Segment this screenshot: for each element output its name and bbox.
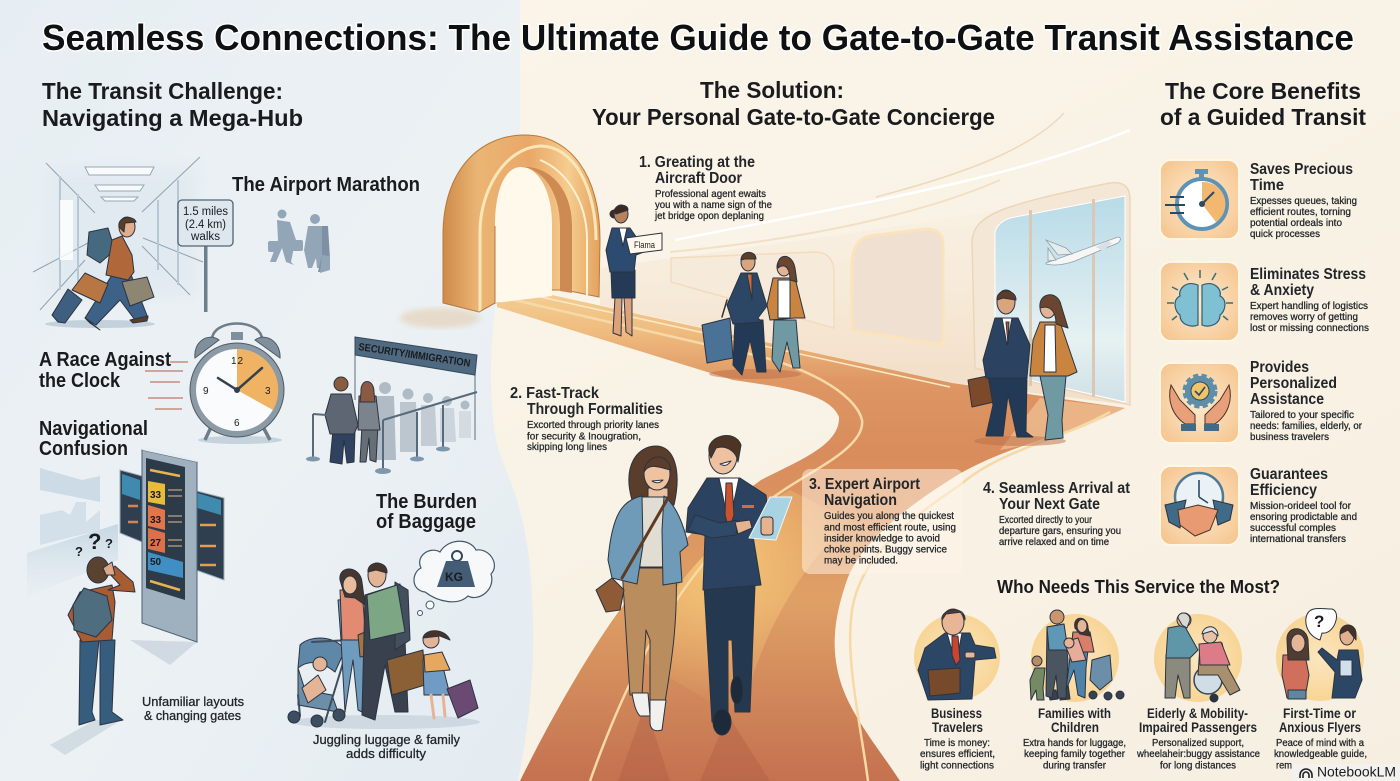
text: elderly: Eiderly & Mobility- [1147,706,1248,721]
text: business travelers: Travelers [932,720,983,735]
benefit: saves time [1160,160,1357,240]
watermark: NotebookLM: NotebookLM [1317,764,1396,780]
icon: confused traveler: ? [75,544,83,559]
audience: business travelers [914,609,1000,772]
illustration: airport corridor and traveler [33,157,203,330]
text: families: Children [1051,720,1099,735]
step 4: seamless arrival: Your Next Gate [999,496,1100,513]
step 1: greeting: Professional agent ewaits [655,188,766,200]
text: families: during transfer [1043,760,1106,772]
step 2: fast-track: skipping long lines [527,441,607,453]
step 3: navigation card: may be included. [824,554,898,566]
text: business travelers: ensures efficient, [920,748,995,760]
text: business travelers: Time is money: [924,737,990,749]
caption: unfamiliar layouts: & changing gates [144,709,241,723]
caption: unfamiliar layouts: Unfamiliar layouts [142,695,244,709]
text: elderly: Impaired Passengers [1139,720,1257,735]
caption: juggling luggage [313,733,461,761]
wall panel 2 [852,229,943,345]
walkway road [497,283,1125,781]
step 4: seamless arrival: departure gars, ensuring you [999,525,1121,537]
caption: unfamiliar layouts [142,695,244,723]
heading: transit challenge: Navigating a Mega-Hub [42,105,303,131]
illustration: faded background signs [27,468,118,597]
icon: anxious flyer and guide: ? [1314,612,1324,631]
text: guarantees efficiency: Efficiency [1250,482,1317,499]
heading: race against the clock [39,349,171,392]
text: guarantees efficiency: ensoring prodictable and [1250,511,1357,523]
step 4: seamless arrival: Excorted directly to your [999,514,1092,526]
heading: race against the clock: A Race Against [39,349,171,371]
illustration: family with luggage [288,563,480,729]
heading: who needs this: Who Needs This Service the Most? [997,577,1280,597]
sign: walking distance: 1.5 miles [183,206,228,218]
benefit: eliminates stress [1160,262,1369,341]
sign: walking distance: walks [190,231,220,243]
caption: juggling luggage: adds difficulty [346,747,427,761]
text: first-time flyers [1274,706,1367,772]
text: personalized assistance: business travelers [1250,431,1329,443]
icon: wayfinding kiosk: 33 [150,515,162,526]
text: eliminates stress: Eliminates Stress [1250,266,1366,283]
icon: alarm clock: 3 [265,386,271,397]
icon: wayfinding kiosk: 50 [150,557,162,568]
benefit: guarantees efficiency [1160,466,1357,545]
text: families: keeping family together [1024,748,1125,760]
text: elderly [1136,706,1260,772]
text: first-time flyers: First-Time or [1283,706,1357,721]
panel: solution scene [400,113,1130,781]
icon: confused traveler: ? [105,536,113,551]
step 3: navigation card: 3. Expert Airport [809,476,920,493]
couple arriving at gate [968,290,1077,446]
icon: businessman [914,609,1000,700]
step 2: fast-track: for security & Inougration, [527,430,641,442]
text: elderly: wheelaheir:buggy assistance [1136,748,1260,760]
icon: wayfinding kiosk: 27 [150,538,162,549]
text: personalized assistance: Personalized [1250,375,1337,392]
text: personalized assistance: Assistance [1250,391,1324,408]
couple with suitcase [702,252,805,379]
sign: walking distance: (2.4 km) [185,219,226,231]
caption: juggling luggage: Juggling luggage & family [313,733,461,747]
text: eliminates stress: & Anxiety [1250,282,1314,299]
text: families: Families with [1038,706,1111,721]
icon: thought bubble with weight [414,541,494,616]
step 3: navigation card: choke points. Buggy service [824,544,947,556]
text: first-time flyers: Anxious Flyers [1279,720,1361,735]
title: Seamless Connections: The Ultimate Guide to Gate-to-Gate Transit Assistance [42,17,1354,58]
step 3: navigation card: insider knowledge to avoid [824,532,940,544]
icon: family [1030,610,1124,702]
text: eliminates stress: Expert handling of logistics [1250,300,1368,312]
panel: who needs this service [914,577,1367,772]
step 1: greeting: you with a name sign of the [655,199,772,211]
text: personalized assistance [1250,359,1362,443]
heading: airport marathon: The Airport Marathon [232,174,420,196]
heading: the solution [592,77,995,130]
icon: alarm clock: 9 [203,386,209,397]
icon: clock and handshake [1160,466,1239,545]
heading: transit challenge: The Transit Challenge: [42,78,283,104]
heading: navigational confusion: Navigational [39,418,148,440]
text: personalized assistance: Tailored to your specific [1250,409,1354,421]
text: saves time: quick processes [1250,228,1320,240]
heading: burden of baggage: of Baggage [376,511,476,533]
step 2: fast-track [510,385,663,453]
text: personalized assistance: Provides [1250,359,1309,376]
sign: walking distance [178,200,233,312]
step 2: fast-track: Through Formalities [527,401,663,418]
heading: core benefits [1160,78,1366,130]
heading: the solution: The Solution: [700,77,844,103]
step 3: navigation card [802,469,963,574]
step 1: greeting: Aircraft Door [655,170,742,187]
window and plane [972,183,1130,405]
text: saves time: potential ordeals into [1250,217,1342,229]
step 4: seamless arrival [983,480,1130,548]
audience: elderly [1136,613,1260,772]
heading: core benefits: of a Guided Transit [1160,104,1366,130]
icon: confused traveler: ? [88,529,101,554]
heading: transit challenge [42,78,303,131]
background: cool left side [0,0,533,781]
icon: thought bubble with weight: KG [445,570,463,584]
step 1: greeting [639,154,772,222]
main couple: traveler and concierge [596,436,792,735]
text: guarantees efficiency [1250,466,1357,545]
illustration: security queue [306,337,477,474]
step 2: fast-track: 2. Fast-Track [510,385,599,402]
step 3: navigation card: Navigation [824,492,897,509]
heading: navigational confusion: Confusion [39,438,128,460]
text: business travelers [920,706,995,772]
text: guarantees efficiency: international transfers [1250,533,1346,545]
heading: core benefits: The Core Benefits [1165,78,1361,104]
text: guarantees efficiency: Mission-orideel tool for [1250,500,1351,512]
text: guarantees efficiency: successful comples [1250,522,1336,534]
heading: race against the clock: the Clock [39,370,121,392]
step 1: greeting: 1. Greating at the [639,154,755,171]
panel: core benefits [1160,78,1369,545]
step 2: fast-track: Excorted through priority lanes [527,419,659,431]
step 3: navigation card: Guides you along the quickest [824,510,954,522]
icon: wheelchair and caregiver [1154,613,1242,702]
text: business travelers: light connections [920,760,994,772]
audience: first-time flyers [1274,608,1367,772]
icon: brain [1160,262,1239,341]
illustration: security queue: SECURITY/IMMIGRATION [358,341,471,370]
text: personalized assistance: needs: families, elderly, or [1250,420,1362,432]
jet bridge wall [600,183,1130,405]
heading: burden of baggage: The Burden [376,491,477,513]
icon: anxious flyer and guide [1276,608,1364,701]
heading: burden of baggage [376,491,477,533]
step 4: seamless arrival: arrive relaxed and on time [999,536,1109,548]
greeter agent with name sign [606,205,662,336]
text: first-time flyers: Peace of mind with a [1276,737,1364,749]
text: eliminates stress: lost or missing connections [1250,322,1369,334]
wall panel 1 [671,252,834,328]
text: elderly: Personalized support, [1152,737,1244,749]
heading: the solution: Your Personal Gate-to-Gate Concierge [592,104,995,130]
icon: alarm clock: 12 [231,356,243,367]
icon: wayfinding kiosk: 33 [150,490,162,501]
watermark: NotebookLM [1292,764,1400,781]
text: elderly: for long distances [1160,760,1236,772]
step 1: greeting: jet bridge opon deplaning [654,210,764,222]
benefit: personalized assistance [1160,359,1362,443]
panel: solution text [510,77,1130,574]
step 4: seamless arrival: 4. Seamless Arrival at [983,480,1130,497]
arch doorway [400,135,600,328]
heading: navigational confusion [39,418,148,460]
text: saves time: efficient routes, torning [1250,206,1351,218]
icon: stopwatch [1160,160,1239,239]
text: guarantees efficiency: Guarantees [1250,466,1328,483]
text: saves time: Expesses queues, taking [1250,195,1357,207]
icon: wayfinding kiosk [120,447,224,665]
icon: alarm clock [145,324,284,444]
audience: families [1023,610,1126,772]
icon: alarm clock: 6 [234,418,240,429]
text: saves time [1250,161,1357,240]
greeter agent with name sign: Flama [634,240,655,250]
text: saves time: Saves Precious [1250,161,1353,178]
icon: tired travelers [268,210,330,273]
icon: confused traveler [50,529,135,755]
text: saves time: Time [1250,177,1284,194]
text: eliminates stress: removes worry of getting [1250,311,1358,323]
text: families: Extra hands for luggage, [1023,737,1126,749]
icon: hands and gear [1160,363,1239,443]
step 3: navigation card: and most efficient route, using [824,522,956,534]
panel: transit challenge [27,78,494,761]
text: first-time flyers: rem [1276,760,1292,772]
text: eliminates stress [1250,266,1369,334]
text: business travelers: Business [931,706,982,721]
text: first-time flyers: knowledgeable guide, [1274,748,1367,760]
text: families [1023,706,1126,772]
